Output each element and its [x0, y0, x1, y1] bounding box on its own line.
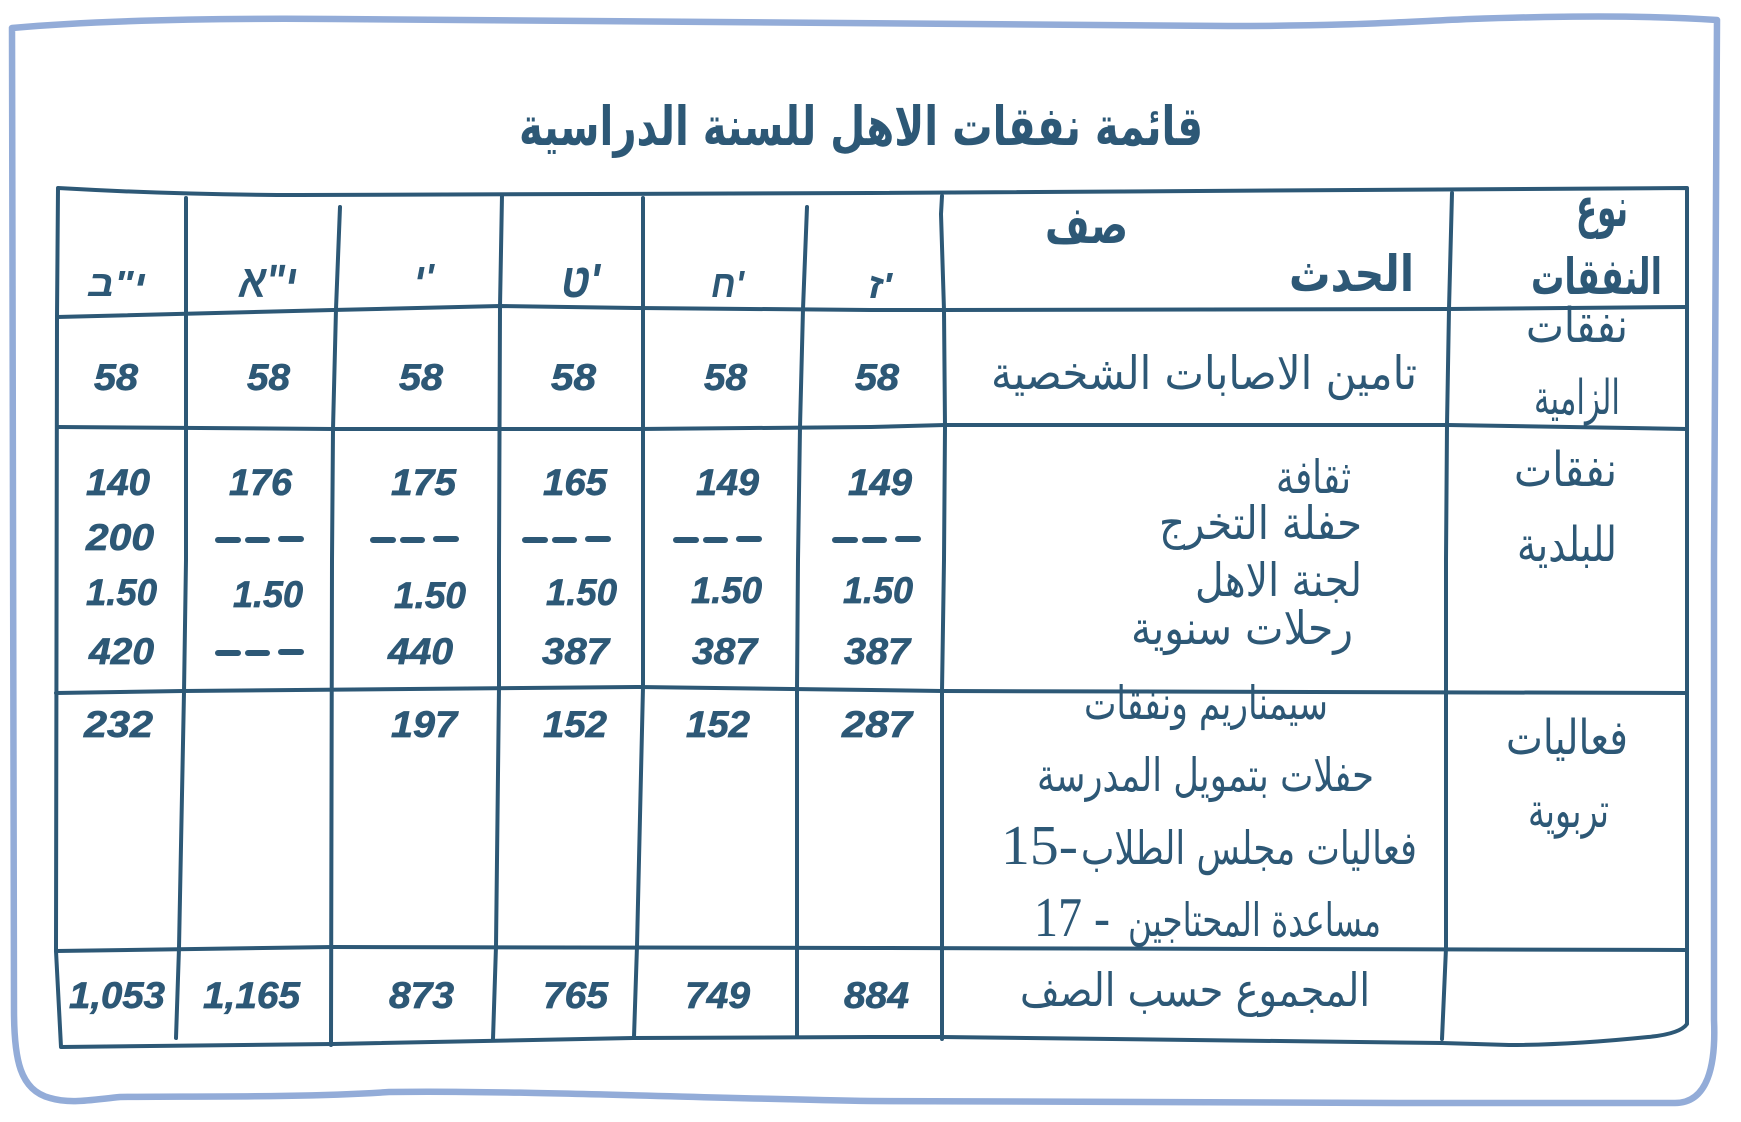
event: culture: ثقافة	[1276, 450, 1351, 504]
event: parents committee: لجنة الاهل	[1195, 553, 1362, 607]
values line 1: 175	[391, 462, 457, 503]
values line 3: 1.50	[546, 572, 617, 613]
row: municipal expenses	[85, 442, 1617, 672]
values line 1: 165	[543, 462, 608, 503]
category label line 2: الزامية	[1534, 370, 1620, 426]
values: 58	[704, 357, 747, 398]
values: 152	[686, 704, 750, 745]
total label: المجموع حسب الصف	[1020, 963, 1370, 1018]
values line 3: 1.50	[394, 575, 466, 616]
total values: 749	[685, 975, 750, 1016]
header: grade 7: ז'	[868, 265, 894, 306]
values: 58	[94, 357, 138, 398]
total values: 1,053	[69, 975, 165, 1016]
total values	[69, 975, 909, 1016]
values	[83, 704, 915, 745]
values line 1: 149	[696, 462, 759, 503]
header: description: صف	[1045, 196, 1128, 256]
row: totals by grade	[69, 963, 1370, 1018]
category label line 2: تربوية	[1528, 783, 1609, 839]
values: 232	[83, 704, 153, 745]
values: 58	[399, 357, 443, 398]
values: 197	[391, 704, 460, 745]
values: 152	[543, 704, 607, 745]
event: helping the needy: 17 -	[1034, 887, 1110, 949]
row: educational activities	[83, 676, 1628, 949]
header: grade 10: י'	[414, 257, 436, 299]
values: 58	[855, 357, 899, 398]
values line 4	[88, 631, 913, 672]
values	[94, 357, 899, 398]
table grid	[56, 188, 1687, 1047]
values line 4: 440	[387, 631, 453, 672]
event name: تامين الاصابات الشخصية	[991, 346, 1417, 401]
values line 3: 1.50	[86, 572, 157, 613]
event: student council: 15-	[1001, 815, 1078, 877]
title: قائمة نفقات الاهل للسنة الدراسية	[519, 95, 1203, 158]
event: seminars: سيمناريم ونفقات	[1084, 676, 1328, 731]
event: student council: فعاليات مجلس الطلاب	[1081, 821, 1417, 875]
event: helping the needy	[1034, 887, 1381, 949]
event: annual trips: رحلات سنوية	[1131, 601, 1353, 656]
category label: نفقات	[1526, 298, 1628, 354]
values line 1: 149	[848, 462, 912, 503]
header: expense type: نوع	[1576, 176, 1628, 239]
total values: 884	[844, 975, 909, 1016]
category label: فعاليات	[1506, 710, 1628, 766]
header: grade 9: ט'	[561, 255, 601, 308]
header: event: الحدث	[1289, 245, 1414, 303]
event: graduation party: حفلة التخرج	[1159, 496, 1362, 551]
total values: 873	[389, 975, 454, 1016]
values line 1: 140	[86, 462, 150, 503]
header: grade 11: י"א	[238, 255, 297, 307]
values line 2: 200	[85, 517, 154, 558]
header: expense type line 2: النفقات	[1531, 248, 1662, 306]
values line 3: 1.50	[843, 570, 913, 611]
row: compulsory expenses	[94, 298, 1628, 426]
event: school funded parties: حفلات بتمويل المدرسة	[1037, 748, 1374, 803]
values: 58	[551, 357, 596, 398]
category label: نفقات	[1514, 442, 1617, 498]
total values: 1,165	[203, 975, 301, 1016]
values line 3: 1.50	[691, 570, 762, 611]
values line 4: 387	[542, 631, 612, 672]
values line 3: 1.50	[233, 574, 303, 615]
header row	[87, 176, 1662, 308]
header: grade 8: ח'	[711, 264, 746, 306]
values line 4: 387	[692, 631, 760, 672]
category label line 2: للبلدية	[1517, 517, 1617, 573]
values line 1: 176	[229, 462, 292, 503]
values: 287	[841, 704, 915, 745]
header: grade 12: י"ב	[87, 263, 146, 304]
total values: 765	[543, 975, 609, 1016]
values line 4: 387	[844, 631, 913, 672]
event: student council	[1001, 815, 1417, 877]
values line 1	[86, 462, 912, 503]
values line 3	[86, 570, 913, 616]
event: helping the needy: مساعدة المحتاجين	[1128, 893, 1381, 948]
values: 58	[247, 357, 290, 398]
values line 4: 420	[88, 631, 154, 672]
